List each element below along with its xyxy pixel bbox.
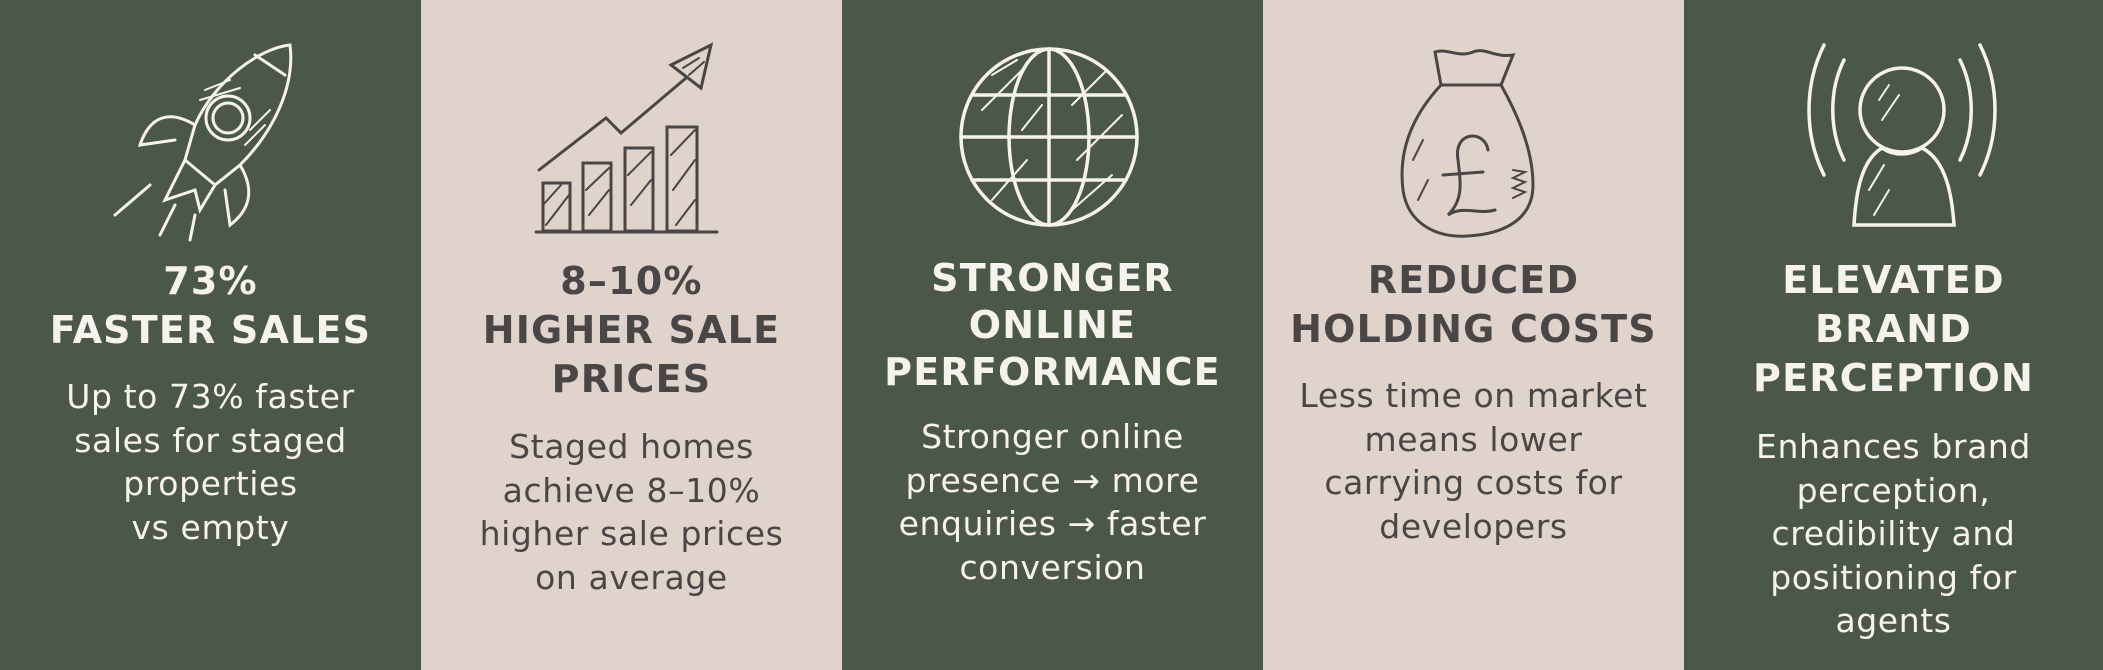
icon: rocket bbox=[113, 43, 292, 242]
text: faster sales description bbox=[66, 377, 355, 546]
text: faster sales description: sales for staged bbox=[74, 420, 347, 460]
heading: 8-10% higher sale prices: 8–10% bbox=[560, 259, 703, 303]
text: higher sale prices description: higher sale prices bbox=[480, 514, 783, 553]
icon: globe bbox=[959, 47, 1139, 227]
text: faster sales description: properties bbox=[123, 464, 298, 503]
text: higher sale prices description: achieve 8–10% bbox=[503, 470, 760, 510]
text: faster sales description: vs empty bbox=[132, 508, 289, 546]
text: online performance description bbox=[899, 417, 1206, 586]
icon: bar chart with arrow bbox=[534, 42, 718, 234]
text: holding costs description: carrying costs for bbox=[1324, 463, 1623, 502]
text: holding costs description: means lower bbox=[1364, 420, 1583, 458]
icon: money bag bbox=[1400, 49, 1534, 238]
text: holding costs description: Less time on market bbox=[1299, 376, 1648, 415]
text: brand perception description: perception, bbox=[1797, 470, 1990, 510]
text: brand perception description: agents bbox=[1835, 601, 1952, 640]
heading: reduced holding costs: HOLDING COSTS bbox=[1290, 307, 1657, 351]
heading: stronger online performance bbox=[884, 256, 1221, 394]
heading: reduced holding costs: REDUCED bbox=[1368, 258, 1579, 302]
panel: elevated brand perception bbox=[1684, 0, 2103, 670]
panel: reduced holding costs bbox=[1263, 0, 1684, 670]
text: online performance description: presence → more bbox=[905, 460, 1200, 500]
heading: elevated brand perception: PERCEPTION bbox=[1753, 356, 2034, 400]
heading: 73% faster sales bbox=[50, 259, 371, 352]
heading: stronger online performance: ONLINE bbox=[969, 303, 1136, 347]
heading: reduced holding costs bbox=[1290, 258, 1657, 351]
icon: person with signal waves bbox=[1807, 43, 1997, 227]
text: higher sale prices description: on average bbox=[535, 558, 728, 596]
heading: 73% faster sales: FASTER SALES bbox=[50, 308, 371, 352]
text: higher sale prices description: Staged homes bbox=[509, 427, 754, 466]
heading: 73% faster sales: 73% bbox=[163, 259, 258, 303]
heading: 8-10% higher sale prices bbox=[483, 259, 780, 401]
panel: faster sales bbox=[0, 0, 421, 670]
text: online performance description: conversion bbox=[959, 548, 1146, 586]
text: holding costs description: developers bbox=[1379, 506, 1568, 546]
text: higher sale prices description bbox=[480, 427, 783, 596]
heading: stronger online performance: PERFORMANCE bbox=[884, 350, 1221, 394]
text: brand perception description: positioning for bbox=[1770, 558, 2017, 596]
heading: stronger online performance: STRONGER bbox=[931, 256, 1174, 300]
panel: higher sale prices bbox=[421, 0, 842, 670]
heading: 8-10% higher sale prices: PRICES bbox=[552, 357, 711, 401]
text: online performance description: Stronger online bbox=[921, 417, 1184, 456]
heading: 8-10% higher sale prices: HIGHER SALE bbox=[483, 308, 780, 352]
heading: elevated brand perception: BRAND bbox=[1815, 307, 1972, 351]
text: brand perception description bbox=[1756, 427, 2031, 640]
text: faster sales description: Up to 73% faster bbox=[66, 377, 355, 416]
text: holding costs description bbox=[1299, 376, 1648, 546]
heading: elevated brand perception: ELEVATED bbox=[1782, 258, 2005, 302]
text: brand perception description: credibility and bbox=[1772, 514, 2015, 553]
panel: stronger online performance bbox=[842, 0, 1263, 670]
text: brand perception description: Enhances brand bbox=[1756, 427, 2031, 466]
text: online performance description: enquiries → faster bbox=[899, 504, 1206, 543]
heading: elevated brand perception bbox=[1753, 258, 2034, 400]
